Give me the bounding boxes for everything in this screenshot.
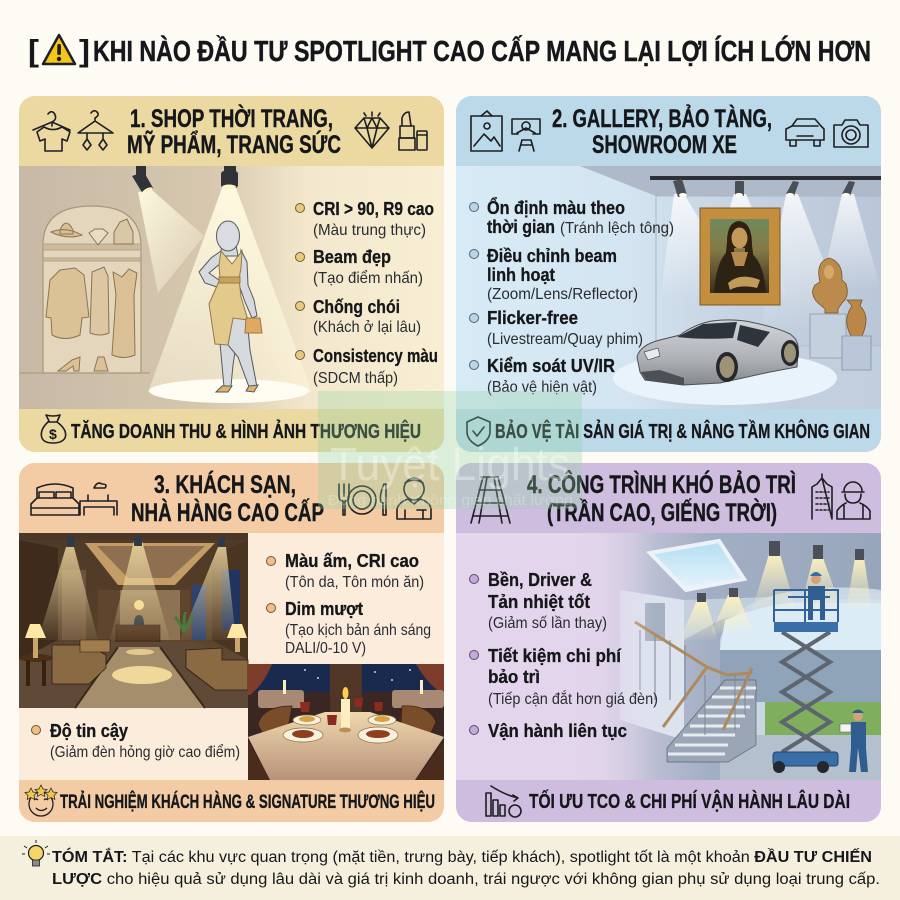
worker on lift xyxy=(808,572,825,620)
bullets: panel 1: CRI > 90, R9 cao xyxy=(313,198,434,219)
illustration: mannequin under spotlights and wardrobe xyxy=(19,166,444,409)
icon: warning triangle xyxy=(43,35,75,64)
side walls xyxy=(19,540,58,660)
bullets: panel 2: Flicker-free xyxy=(487,307,578,328)
watermark: Đồng hành Không gian chất lượng xyxy=(328,492,573,509)
bullets: panel 1: (Tạo điểm nhấn) xyxy=(313,269,423,287)
sports car xyxy=(637,320,799,385)
chairs behind xyxy=(258,706,436,745)
back wall xyxy=(98,590,190,626)
bullets: panel 2: (Tránh lệch tông) xyxy=(560,220,674,237)
bullets: panel 1: Beam đẹp xyxy=(313,246,391,267)
heading: panel 4: 4. CÔNG TRÌNH KHÓ BẢO TRÌ xyxy=(527,469,796,499)
bullets: panel 2: Ổn định màu theo xyxy=(487,197,625,218)
bullets: panel 4 xyxy=(470,569,658,741)
heading: panel 4: (TRẦN CAO, GIẾNG TRỜI) xyxy=(547,497,777,527)
heading: panel 4 xyxy=(527,469,796,527)
ceiling coffers xyxy=(85,543,215,585)
candle xyxy=(341,699,350,729)
heading: panel 3: NHÀ HÀNG CAO CẤP xyxy=(131,498,324,527)
footer band xyxy=(19,436,444,452)
skylight xyxy=(650,541,744,590)
header band xyxy=(456,463,881,533)
plinth small xyxy=(842,336,871,370)
bullets: panel 4: Tản nhiệt tốt xyxy=(488,591,590,612)
wine glasses xyxy=(300,698,383,725)
watermark: Tuyệt Lights xyxy=(330,438,570,490)
illustration: hotel lobby xyxy=(19,533,248,708)
tableware xyxy=(283,715,398,743)
bullets: panel 4: Tiết kiệm chi phí xyxy=(488,645,622,666)
inspector xyxy=(840,710,868,772)
curtains xyxy=(248,664,444,695)
header band xyxy=(19,463,444,533)
icon: falling cost bars xyxy=(486,786,521,817)
floor spotlight pool xyxy=(613,358,837,405)
light beams xyxy=(664,194,876,308)
bullets: panel 3: (Giảm đèn hỏng giờ cao điểm) xyxy=(50,743,240,761)
panel: gallery, bảo tàng, showroom xyxy=(456,96,881,452)
ceiling lights with beams xyxy=(680,541,872,640)
icons: car and camera xyxy=(786,119,868,147)
footer band xyxy=(456,780,881,822)
lounge sofas and lamps right xyxy=(176,613,248,690)
reception desk xyxy=(116,625,160,643)
floor xyxy=(19,642,248,708)
scissor lift xyxy=(773,590,838,773)
white wall xyxy=(620,590,684,740)
bullets: panel 3: Độ tin cậy xyxy=(50,720,129,741)
stadium and field xyxy=(720,588,881,780)
lounge sofas and lamps left xyxy=(19,624,110,686)
bullets: panel 2: (Livestream/Quay phim) xyxy=(487,331,643,348)
heading: panel 2: 2. GALLERY, BẢO TÀNG, xyxy=(552,103,772,133)
summary band xyxy=(0,836,900,900)
watermark xyxy=(318,391,582,509)
bullets: panel 4: bảo trì xyxy=(488,666,540,687)
title: ] xyxy=(79,33,90,68)
footer band xyxy=(456,436,881,452)
icon: money bag xyxy=(41,415,66,443)
night windows with stars xyxy=(248,664,330,692)
icons: building and worker xyxy=(812,474,870,519)
bullets: panel 2: Kiểm soát UV/IR xyxy=(487,355,615,376)
bullets: panel 1: Chống chói xyxy=(313,296,400,317)
fade over text area xyxy=(456,533,656,780)
heading: panel 3 xyxy=(131,470,324,527)
heading: panel 2 xyxy=(552,103,772,159)
icons: diamond and lipstick xyxy=(355,112,427,150)
heading: panel 3: 3. KHÁCH SẠN, xyxy=(154,470,296,499)
text background xyxy=(19,533,444,780)
icon: smiley with stars xyxy=(25,785,57,816)
ceiling spotlights xyxy=(132,166,238,196)
bullets: panel 4: (Tiếp cận đắt hơn giá đèn) xyxy=(488,689,658,708)
panel: công trình khó bảo trì xyxy=(456,463,881,822)
footer: panel 3: TRẢI NGHIỆM KHÁCH HÀNG & SIGNATURE THƯƠNG HIỆU xyxy=(60,791,435,813)
bullets: panel 4: (Giảm số lần thay) xyxy=(488,615,607,632)
wardrobe niche xyxy=(19,206,150,373)
icon: light bulb xyxy=(22,840,50,866)
heading: panel 1: 1. SHOP THỜI TRANG, xyxy=(130,103,333,133)
icons: shirt and earrings hangers xyxy=(33,111,113,151)
bullets: panel 2: thời gian xyxy=(487,216,555,237)
floor pool of light xyxy=(149,379,309,403)
spot beam centre xyxy=(148,188,312,392)
panel: khách sạn, nhà hàng xyxy=(19,463,444,822)
bullets: panel 2: (Bảo vệ hiện vật) xyxy=(487,379,597,396)
illustration: candlelit dining table xyxy=(248,664,444,780)
icon: ladder xyxy=(471,477,510,523)
staircase xyxy=(635,622,756,762)
bullets: panel 1: Consistency màu xyxy=(313,345,438,366)
heading: panel 2: SHOWROOM XE xyxy=(592,131,737,159)
summary text: TÓM TẮT: Tại các khu vực quan trọng (mặt tiền, trưng bày, tiếp khách), spotlight tốt là một khoản ĐẦU TƯ CHIẾN xyxy=(52,848,872,866)
heading: panel 1 xyxy=(127,103,341,159)
header band xyxy=(19,96,444,112)
bullets: panel 1: (SDCM thấp) xyxy=(313,370,398,387)
bullets: panel 2 xyxy=(470,197,674,396)
bullets: panel 3: (Tôn da, Tôn món ăn) xyxy=(285,574,424,591)
bullets: panel 3: DALI/0-10 V) xyxy=(285,640,366,657)
floor xyxy=(800,346,881,347)
illustration: skylight, stairs, scissor lift and stadium xyxy=(456,533,881,780)
footer: panel 1: TĂNG DOANH THU & HÌNH ẢNH THƯƠNG HIỆU xyxy=(71,419,421,443)
bullets: panel 1 xyxy=(296,198,438,387)
ceiling xyxy=(580,166,881,196)
back tables xyxy=(258,690,304,708)
header band xyxy=(456,96,881,111)
icon: shield check xyxy=(467,417,490,446)
beams xyxy=(38,541,236,640)
icons: picture frame and sculpture xyxy=(471,111,540,151)
chairs front xyxy=(248,742,444,780)
bullets: panel 4: Vận hành liên tục xyxy=(488,720,627,741)
framed painting xyxy=(700,208,780,305)
amphora xyxy=(847,300,866,336)
table xyxy=(248,712,444,780)
panel: shop thời trang xyxy=(19,96,444,452)
bullets: panel 1: (Khách ở lại lâu) xyxy=(313,319,421,336)
illustration: gallery with painting, statues and car xyxy=(456,166,881,409)
bullets: panel 3 xyxy=(32,550,431,761)
bullets: panel 3: Màu ấm, CRI cao xyxy=(285,550,419,571)
pharaoh bust xyxy=(813,258,847,313)
bullets: panel 4: Bền, Driver & xyxy=(488,569,592,590)
plinth large xyxy=(810,314,846,358)
heading: panel 1: MỸ PHẨM, TRANG SỨC xyxy=(127,129,341,159)
bullets: panel 2: linh hoạt xyxy=(487,264,555,285)
ceiling spots xyxy=(67,536,225,546)
summary text line 2: LƯỢC cho hiệu quả sử dụng lâu dài và giá trị kinh doanh, trái ngược với không gian phụ sử dụng loại trung cấp. xyxy=(52,871,880,888)
icons: bed and nightstand xyxy=(31,483,117,515)
title: [ xyxy=(28,33,39,68)
bullets: panel 2: Điều chỉnh beam xyxy=(487,245,617,266)
bullets: panel 1: (Màu trung thực) xyxy=(313,222,426,239)
spot beam left xyxy=(138,190,204,293)
icon: money bag: $ xyxy=(49,426,57,442)
bullets: panel 3: Dim mượt xyxy=(285,598,363,619)
track and spotlights xyxy=(650,176,881,197)
icons: plate, cutlery and waiter xyxy=(339,478,431,519)
footer band xyxy=(19,780,444,822)
bullets: panel 3: (Tạo kịch bản ánh sáng xyxy=(285,622,431,639)
bullets: panel 2: (Zoom/Lens/Reflector) xyxy=(487,286,638,303)
mannequin xyxy=(199,221,262,392)
